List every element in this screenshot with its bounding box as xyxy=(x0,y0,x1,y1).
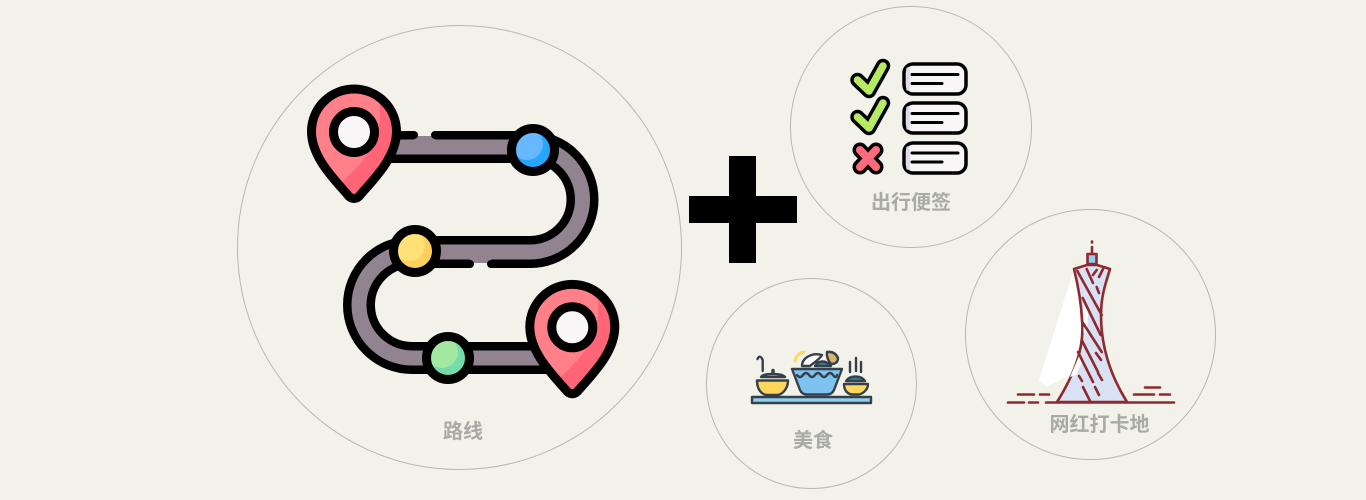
icon: tower xyxy=(1008,242,1174,402)
landmark circle xyxy=(966,210,1216,460)
icon: blue stop xyxy=(511,128,554,172)
icon: food tray xyxy=(752,352,871,403)
label: landmark: 网红打卡地 xyxy=(1050,413,1150,436)
label: food: 美食 xyxy=(793,428,833,452)
panel: food xyxy=(706,278,916,488)
plus sign xyxy=(689,156,797,263)
panel: route xyxy=(238,26,682,470)
icon: checklist xyxy=(858,64,966,173)
route circle xyxy=(238,26,682,470)
icon: yellow stop xyxy=(393,229,436,272)
panel: landmark xyxy=(966,210,1216,460)
icon: green stop xyxy=(426,336,470,380)
panel: travel notes xyxy=(790,6,1032,248)
travel notes circle xyxy=(790,6,1032,248)
icon: end pin xyxy=(530,284,615,394)
label: travel notes: 出行便签 xyxy=(871,191,951,214)
icon: winding road xyxy=(354,130,583,358)
label: route: 路线 xyxy=(443,420,483,443)
icon: tower white shadow xyxy=(1039,272,1084,387)
icon: start pin xyxy=(312,89,397,198)
food circle xyxy=(706,278,916,488)
